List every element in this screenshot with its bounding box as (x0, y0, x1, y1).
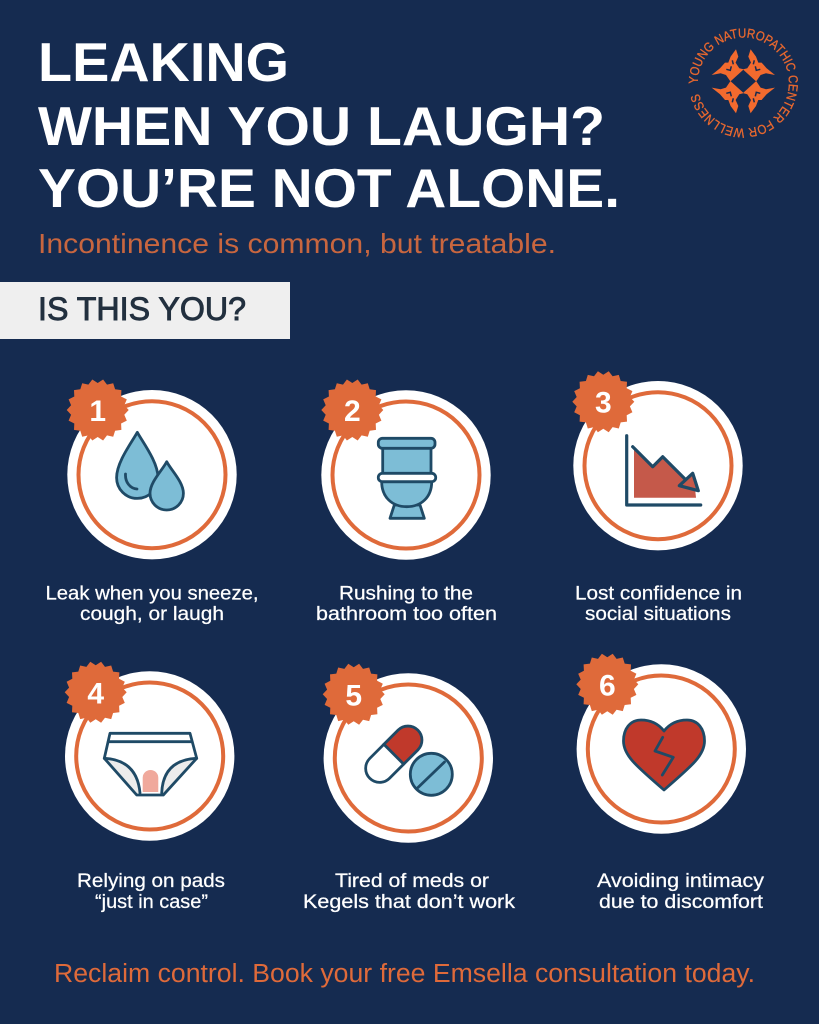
icon: water drops (117, 432, 183, 510)
badge 5 (323, 664, 385, 725)
caption: cough, or laugh (80, 603, 224, 625)
title: WHEN YOU LAUGH? (38, 95, 605, 157)
caption (575, 582, 742, 625)
caption (316, 582, 497, 625)
badge 3 (572, 371, 634, 432)
caption: social situations (585, 603, 731, 625)
badge 2 (321, 380, 383, 440)
icon: broken heart (624, 720, 704, 790)
badge 4 (65, 662, 127, 723)
panel: relying on pads (65, 662, 234, 913)
caption (303, 870, 515, 913)
title: YOU’RE NOT ALONE. (38, 157, 620, 219)
panel: rushing to the bathroom (316, 380, 497, 625)
caption: “just in case” (95, 891, 208, 913)
caption (597, 870, 764, 913)
caption: Lost confidence in (575, 582, 742, 604)
title: LEAKING (38, 31, 289, 93)
badge 6 (576, 654, 638, 715)
subtitle: Incontinence is common, but treatable. (38, 228, 556, 259)
badge 2: 2 (344, 395, 361, 428)
section heading: is this you: IS THIS YOU? (38, 291, 246, 327)
panel: lost confidence (572, 371, 743, 625)
caption: Kegels that don’t work (303, 891, 515, 913)
title (38, 31, 620, 219)
section heading: is this you (0, 282, 290, 339)
caption: Tired of meds or (335, 870, 490, 892)
panel: leak when you sneeze (46, 380, 258, 625)
caption (46, 582, 258, 625)
caption: Leak when you sneeze, (46, 582, 258, 604)
icon: underwear with pad (104, 733, 197, 795)
caption (77, 870, 225, 913)
icon: capsule and tablet (360, 720, 452, 795)
caption: bathroom too often (316, 603, 497, 625)
caption: Avoiding intimacy (597, 870, 764, 892)
badge 1: 1 (89, 395, 106, 428)
call to action: Reclaim control. Book your free Emsella consultation today. (54, 960, 755, 988)
icon: toilet (378, 438, 436, 518)
badge 5: 5 (345, 679, 362, 712)
badge 6: 6 (599, 669, 616, 702)
badge 3: 3 (595, 387, 612, 420)
caption: Rushing to the (339, 582, 473, 604)
logo: Young Naturopathic Center for Wellness: YOUNG NATUROPATHIC CENTER FOR WELLNESS (688, 28, 798, 138)
panel: tired of meds (303, 664, 515, 913)
icon: declining chart (627, 436, 701, 505)
caption: due to discomfort (599, 891, 764, 913)
badge 1 (67, 380, 129, 440)
badge 4: 4 (87, 677, 104, 710)
caption: Relying on pads (77, 870, 225, 892)
panel: avoiding intimacy (576, 654, 764, 913)
